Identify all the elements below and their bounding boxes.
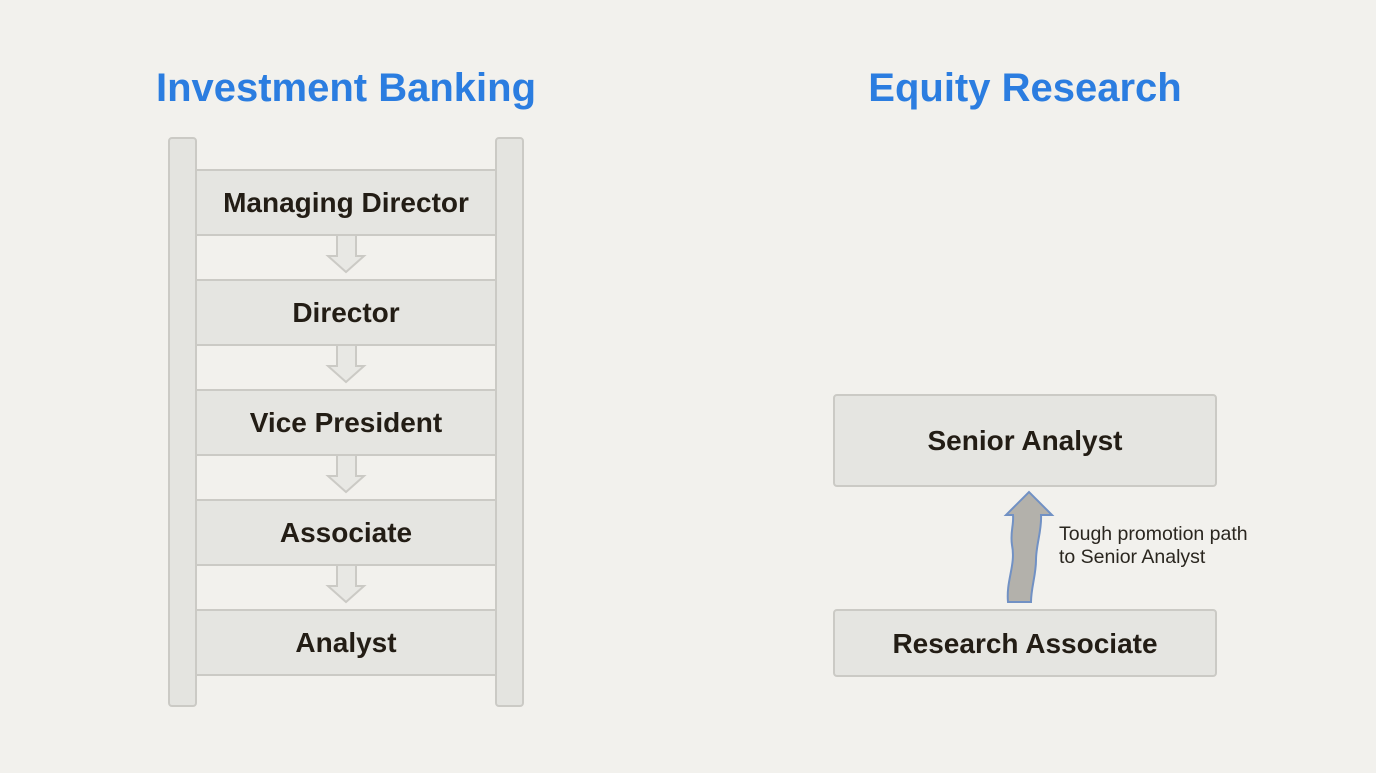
rung: Director bbox=[196, 280, 496, 345]
arrow down 4 bbox=[328, 565, 364, 602]
arrow down 3 bbox=[328, 455, 364, 492]
rung: Associate bbox=[196, 500, 496, 565]
box: Research Associate: Research Associate bbox=[892, 628, 1158, 659]
ladder: investment banking bbox=[169, 138, 523, 706]
ladder rail right bbox=[496, 138, 523, 706]
rung: Director: Director bbox=[292, 297, 400, 328]
box: Senior Analyst bbox=[834, 395, 1216, 486]
title: Equity Research: Equity Research bbox=[868, 66, 1182, 110]
rung: Vice President: Vice President bbox=[250, 407, 442, 438]
title: Investment Banking: Investment Banking bbox=[156, 66, 536, 110]
arrow down 2 bbox=[328, 345, 364, 382]
rung: Associate: Associate bbox=[280, 517, 412, 548]
arrow: wavy promotion arrow bbox=[1006, 492, 1052, 602]
rung: Analyst: Analyst bbox=[295, 627, 397, 658]
box: Research Associate bbox=[834, 610, 1216, 676]
callout text: Tough promotion path bbox=[1059, 523, 1248, 545]
rung: Analyst bbox=[196, 610, 496, 675]
arrow down 1 bbox=[328, 235, 364, 272]
rung: Managing Director bbox=[196, 170, 496, 235]
box: Senior Analyst: Senior Analyst bbox=[927, 425, 1123, 456]
rung: Managing Director: Managing Director bbox=[223, 187, 469, 218]
rung: Vice President bbox=[196, 390, 496, 455]
callout text: to Senior Analyst bbox=[1059, 546, 1206, 568]
ladder rail left bbox=[169, 138, 196, 706]
